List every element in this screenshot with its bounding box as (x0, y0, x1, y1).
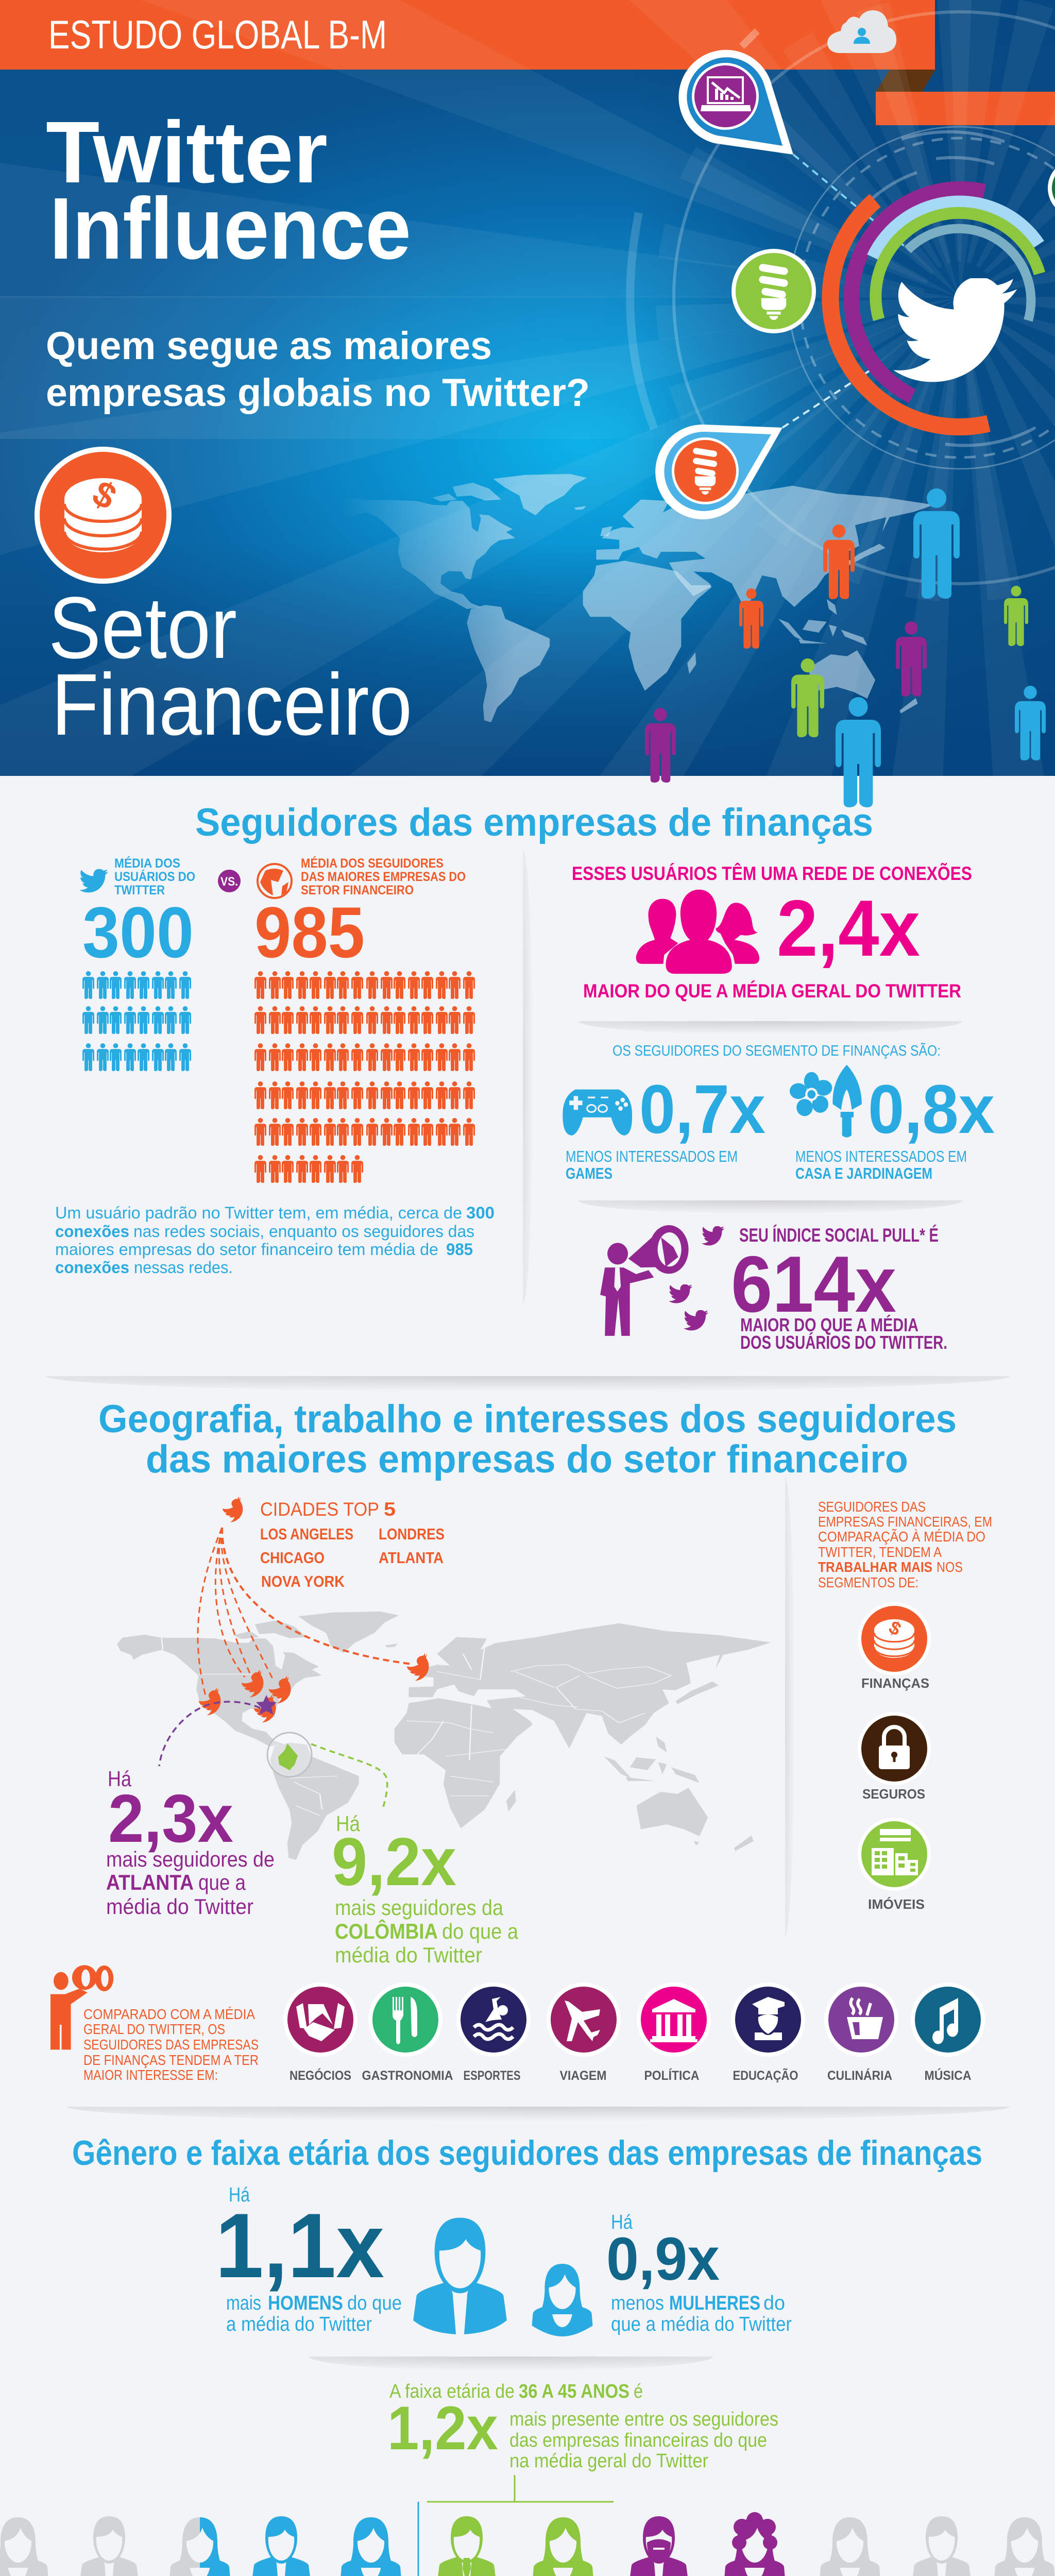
panel: twitter average users: MÉDIA DOS (114, 856, 180, 871)
panel: twitter average users: 300 (82, 892, 194, 973)
subtitle: empresas globais no Twitter? (46, 371, 590, 415)
panel: twitter average users: USUÁRIOS DO (114, 869, 195, 884)
callout: men: a média do Twitter (226, 2313, 372, 2335)
divider shadow (309, 2357, 713, 2371)
callout: women: que a média do Twitter (611, 2313, 792, 2335)
text block: connections paragraph: 985 (446, 1240, 473, 1259)
subtitle: Quem segue as maiores (46, 324, 492, 368)
panel: social pull: DOS USUÁRIOS DO TWITTER. (740, 1332, 947, 1353)
icon: vs badge: VS. (220, 875, 238, 889)
panel: network size: MAIOR DO QUE A MÉDIA GERAL DO TWITTER (583, 980, 961, 1002)
text block: connections paragraph (55, 1204, 495, 1277)
divider shadow (67, 2107, 1010, 2121)
panel: lower interests: MENOS INTERESSADOS EM (566, 1147, 738, 1165)
panel: twitter average users: TWITTER (114, 883, 165, 897)
callout: colombia: do que a (442, 1919, 519, 1943)
text block: interests intro: MAIOR INTERESSE EM: (83, 2067, 218, 2083)
column divider (523, 850, 533, 1303)
callout: colombia: Há (336, 1811, 361, 1836)
panel: top 5 cities: 5 (384, 1499, 396, 1520)
icon: cloud (827, 10, 896, 53)
callout: age 36 to 45: das empresas financeiras do que (509, 2430, 767, 2451)
panel: top 5 cities: CIDADES TOP (260, 1499, 379, 1520)
hero people figures (645, 488, 1046, 807)
text block: work segments (818, 1499, 992, 1590)
panel: lower interests: GAMES (566, 1164, 612, 1182)
subtitle (46, 324, 590, 415)
hero concentric circles (630, 12, 1055, 584)
icon: game controller (563, 1090, 632, 1136)
world map grey (117, 1612, 771, 1860)
pictogram: 300 blue people (82, 971, 191, 1071)
twitter rings (830, 189, 1040, 427)
callout: men: HOMENS (268, 2292, 343, 2314)
callout: women: Há (611, 2211, 633, 2233)
text block: work segments: SEGUIDORES DAS (818, 1499, 926, 1515)
icon: travel: VIAGEM (559, 2069, 607, 2083)
callout: age 36 to 45: A faixa etária de (389, 2381, 515, 2402)
icon: city birds (197, 1652, 436, 1724)
callout: colombia: mais seguidores da (335, 1895, 504, 1920)
callout: men: mais (226, 2292, 261, 2314)
panel: lower interests: 0,7x (639, 1071, 765, 1148)
panel: lower interests: OS SEGUIDORES DO SEGMENTO DE FINANÇAS SÃO: (612, 1042, 941, 1059)
hero world map (324, 474, 934, 722)
icon: finance segment (858, 1602, 931, 1691)
panel: top 5 cities: LOS ANGELES (260, 1525, 353, 1543)
panel: lower interests: CASA E JARDINAGEM (795, 1164, 932, 1182)
icon: insurance segment (858, 1712, 931, 1802)
text block: connections paragraph: conexões (55, 1258, 129, 1277)
panel: top 5 cities (220, 1496, 445, 1590)
dashed connectors (782, 155, 911, 428)
panel: lower interests: MENOS INTERESSADOS EM (795, 1147, 967, 1165)
icon: green bulb badge (731, 249, 816, 333)
callout: atlanta: média do Twitter (106, 1894, 253, 1919)
callout: men (215, 2184, 402, 2335)
icon: flower and trowel (790, 1065, 862, 1138)
panel: network size (572, 862, 972, 1002)
icon: sports (456, 1982, 531, 2083)
text block: connections paragraph: conexões (55, 1222, 129, 1241)
divider shadow (578, 1200, 962, 1214)
icon: real estate segment (858, 1818, 931, 1912)
text block: connections paragraph: nas redes sociais, enquanto os seguidores das (133, 1222, 474, 1241)
text block: work segments: EMPRESAS FINANCEIRAS, EM (818, 1514, 992, 1530)
callout: atlanta: Há (108, 1767, 132, 1791)
callout: atlanta (106, 1767, 275, 1919)
icon: music: MÚSICA (924, 2067, 972, 2083)
callout: colombia: COLÔMBIA (335, 1919, 438, 1943)
callout: colombia: média do Twitter (335, 1943, 482, 1967)
colombia magnifier and connector (267, 1733, 387, 1809)
hero banner background (0, 0, 1055, 776)
icon: cuisine: CULINÁRIA (827, 2068, 892, 2083)
icon: real estate segment: IMÓVEIS (868, 1896, 925, 1912)
title: Twitter (46, 104, 328, 201)
callout: women: 0,9x (606, 2225, 720, 2293)
panel: twitter average users (79, 856, 195, 973)
callout: women: menos (611, 2292, 664, 2314)
text block: interests intro: GERAL DO TWITTER, OS (83, 2021, 225, 2037)
panel: lower interests (563, 1042, 995, 1182)
icon: woman portrait (532, 2264, 592, 2336)
icon: small birds (669, 1226, 724, 1330)
callout: age 36 to 45: na média geral do Twitter (509, 2450, 708, 2472)
callout: men: 1,1x (215, 2194, 384, 2297)
sector title (48, 579, 412, 754)
icon: three people (636, 890, 759, 974)
icon: cuisine (824, 1982, 898, 2083)
panel: sector followers average: DAS MAIORES EMPRESAS DO (301, 870, 466, 884)
sector title: Financeiro (52, 656, 412, 754)
callout: women (606, 2211, 792, 2335)
bracket lines (233, 2475, 804, 2576)
text block: connections paragraph: 300 (466, 1204, 495, 1222)
text block: interests intro: SEGUIDORES DAS EMPRESAS (83, 2037, 259, 2053)
text block: connections paragraph: Um usuário padrão no Twitter tem, em média, cerca de (55, 1204, 462, 1222)
icon: man with binoculars (50, 1965, 113, 2049)
icon: education (731, 1982, 805, 2083)
title (46, 104, 411, 278)
icon: politics: POLÍTICA (644, 2068, 700, 2083)
callout: age 36 to 45: 1,2x (387, 2394, 498, 2463)
icon: travel (547, 1982, 621, 2083)
callout: atlanta: ATLANTA (106, 1870, 194, 1894)
text block: work segments: NOS (937, 1559, 963, 1575)
column divider (785, 1477, 795, 1938)
atlanta star and connector (159, 1695, 277, 1766)
text block: connections paragraph: maiores empresas do setor financeiro tem média de (55, 1240, 438, 1259)
panel: top 5 cities: CHICAGO (260, 1549, 325, 1567)
icon: vs badge (218, 870, 241, 892)
heading: geography section: das maiores empresas do setor financeiro (146, 1437, 908, 1481)
callout: atlanta: mais seguidores de (106, 1847, 275, 1871)
text block: work segments: SEGMENTOS DE: (818, 1574, 918, 1590)
heading: geography section (98, 1397, 957, 1481)
callout: men: do que (347, 2292, 402, 2314)
panel: top 5 cities: ATLANTA (379, 1549, 444, 1567)
divider shadow (578, 1021, 962, 1035)
icon: business (283, 1982, 358, 2083)
panel: social pull (600, 1225, 947, 1353)
text block: interests intro (83, 2006, 259, 2083)
panel: social pull: SEU ÍNDICE SOCIAL PULL* É (739, 1225, 939, 1246)
callout: age 36 to 45: 36 A 45 ANOS (519, 2381, 629, 2402)
icon: man portrait (413, 2218, 507, 2334)
callout: age 36 to 45: mais presente entre os seguidores (509, 2409, 778, 2430)
text block: work segments: TWITTER, TENDEM A (818, 1544, 942, 1560)
header text: ESTUDO GLOBAL B-M (48, 12, 387, 57)
title: Influence (49, 180, 411, 278)
panel: sector followers average: MÉDIA DOS SEGUIDORES (301, 856, 444, 871)
panel: lower interests: 0,8x (868, 1071, 995, 1148)
callout: age 36 to 45 (387, 2381, 778, 2472)
icon: twitter bird large (893, 277, 1017, 382)
callout: age 36 to 45: é (634, 2381, 643, 2402)
panel: sector followers average (254, 856, 466, 973)
city connectors (198, 1528, 412, 1698)
panel: social pull: MAIOR DO QUE A MÉDIA (740, 1314, 918, 1335)
text block: work segments: COMPARAÇÃO À MÉDIA DO (818, 1529, 985, 1545)
panel: top 5 cities: LONDRES (379, 1525, 445, 1543)
callout: atlanta: 2,3x (108, 1781, 233, 1856)
panel: sector followers average: 985 (254, 892, 365, 973)
text block: connections paragraph: nessas redes. (134, 1258, 233, 1277)
callout: colombia: 9,2x (332, 1824, 456, 1900)
icon: gastronomy: GASTRONOMIA (362, 2069, 453, 2083)
icon: insurance segment: SEGUROS (862, 1786, 925, 1802)
sector title: Setor (48, 579, 237, 677)
heading: geography section: Geografia, trabalho e interesses dos seguidores (98, 1397, 957, 1441)
icon: purple chart pin (678, 50, 793, 155)
pictogram: 985 orange people (254, 971, 475, 1183)
icon: business: NEGÓCIOS (290, 2067, 351, 2083)
icon: finance coins badge (35, 447, 172, 584)
icon: sports: ESPORTES (464, 2069, 520, 2083)
icon: orange bulb pin (655, 425, 782, 519)
panel: sector followers average: SETOR FINANCEIRO (301, 883, 414, 897)
heading: followers section: Seguidores das empresas de finanças (195, 801, 873, 844)
age group portraits (0, 2512, 1055, 2576)
text block: interests intro: DE FINANÇAS TENDEM A TER (83, 2052, 259, 2068)
callout: men: Há (229, 2184, 250, 2206)
callout: atlanta: que a (198, 1870, 246, 1894)
header orange bar (0, 0, 1055, 125)
panel: top 5 cities: NOVA YORK (261, 1572, 345, 1590)
callout: women: do (763, 2292, 785, 2314)
text block: interests intro: COMPARADO COM A MÉDIA (83, 2006, 255, 2022)
icon: gastronomy (362, 1982, 453, 2083)
panel: social pull: 614x (731, 1240, 896, 1329)
icon: man with megaphone (600, 1225, 689, 1336)
icon: finance segment: FINANÇAS (861, 1675, 929, 1691)
panel: network size: ESSES USUÁRIOS TÊM UMA REDE DE CONEXÕES (572, 862, 972, 884)
icon: edge badge (1050, 161, 1055, 215)
panel: network size: 2,4x (777, 884, 920, 973)
callout: women: MULHERES (669, 2292, 760, 2314)
divider shadow (46, 1376, 1010, 1392)
icon: education: EDUCAÇÃO (733, 2067, 798, 2083)
callout: colombia (332, 1811, 519, 1967)
icon: music (911, 1982, 985, 2083)
text block: work segments: TRABALHAR MAIS (818, 1559, 932, 1575)
icon: politics (637, 1982, 711, 2083)
